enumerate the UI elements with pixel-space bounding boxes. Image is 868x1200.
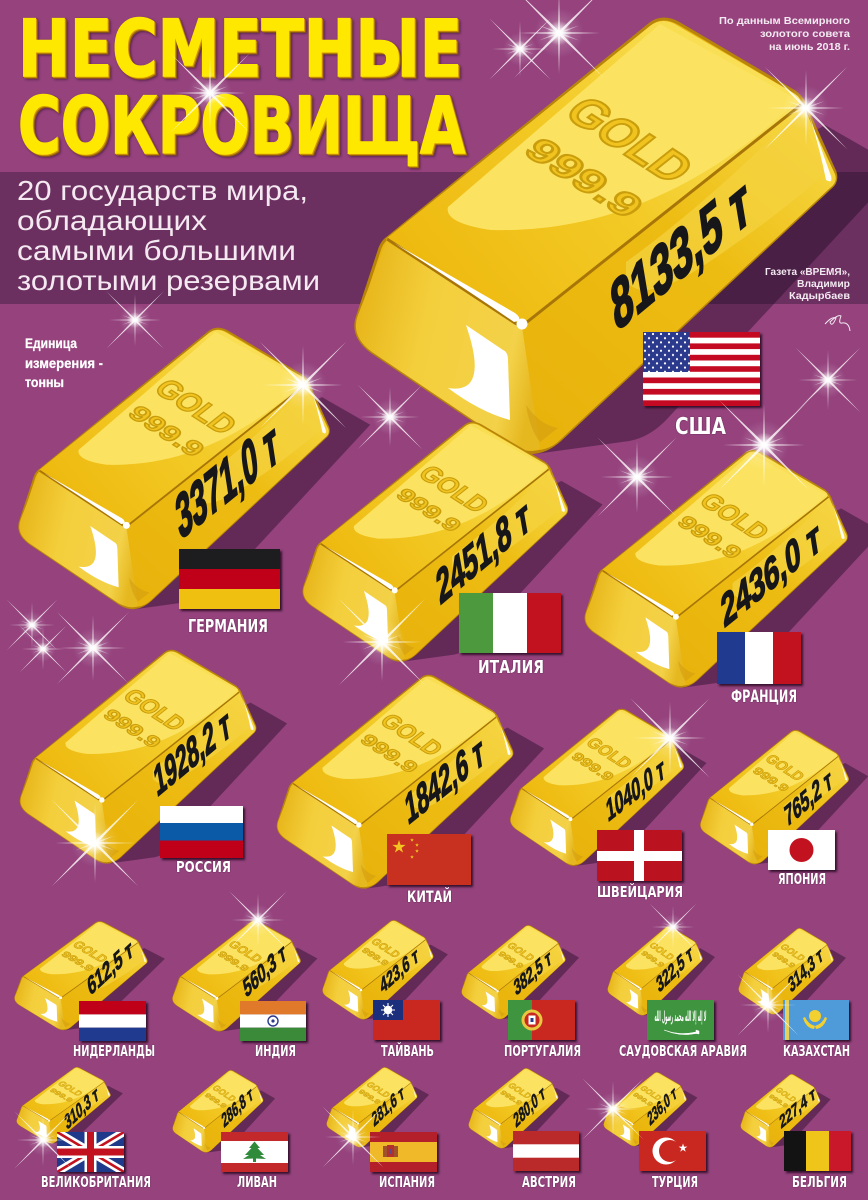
- flag: France: [717, 632, 801, 684]
- value: India: 560,3 т: [241, 937, 288, 1003]
- gold bar: Taiwan: 999.9: [359, 946, 391, 967]
- country: Netherlands: [15, 921, 165, 1060]
- subtitle: 20 государств мира,: [17, 175, 308, 206]
- gold bar: China: GOLD: [375, 709, 449, 760]
- country: Germany: [19, 329, 370, 637]
- gold bar: Japan: 999.9: [749, 765, 792, 794]
- gold bar: France: GOLD: [693, 488, 776, 545]
- subtitle: золотыми резервами: [17, 265, 320, 296]
- unit note: [25, 335, 103, 390]
- gold bar: Portugal: 999.9: [496, 950, 526, 970]
- gold bar: Spain: 999.9: [356, 1089, 382, 1106]
- country: Kazakhstan: [739, 928, 850, 1060]
- label: Austria: АВСТРИЯ: [522, 1173, 576, 1191]
- flag: Italy: [459, 593, 561, 653]
- title: СОКРОВИЩА: [18, 82, 465, 172]
- gold bar: Russia: [20, 651, 287, 864]
- country: Saudi Arabia: [608, 926, 747, 1060]
- gold bar: Lebanon: GOLD: [210, 1084, 239, 1103]
- gold bar: Italy: [303, 423, 603, 662]
- source note: золотого совета: [760, 29, 850, 40]
- gold bar: Austria: 999.9: [498, 1090, 523, 1107]
- gold bar: USA: [356, 19, 868, 454]
- country: India: [173, 921, 317, 1060]
- label: Spain: ИСПАНИЯ: [379, 1173, 435, 1191]
- gold bar: Portugal: [462, 925, 579, 1019]
- source note: на июнь 2018 г.: [769, 42, 850, 53]
- flag: Portugal: [508, 1000, 575, 1040]
- gold bar: Russia: 999.9: [99, 705, 166, 751]
- flag: China: [387, 834, 471, 885]
- label: Russia: РОССИЯ: [176, 858, 231, 876]
- value: China: 1842,6 т: [402, 727, 487, 835]
- gold bar: France: 999.9: [672, 512, 747, 563]
- gold bar: United Kingdom: 999.9: [48, 1087, 74, 1104]
- gold bar: Lebanon: 999.9: [202, 1092, 228, 1110]
- country: Russia: [20, 651, 287, 876]
- gold bar: Italy: GOLD: [412, 460, 496, 518]
- country: Switzerland: [511, 709, 706, 901]
- gold bar: France: [585, 451, 868, 688]
- country: Turkey: [604, 1072, 706, 1191]
- gold bar: Switzerland: [511, 709, 706, 866]
- label: Turkey: ТУРЦИЯ: [652, 1173, 698, 1191]
- value: United Kingdom: 310,3 т: [63, 1081, 100, 1134]
- value: Austria: 280,0 т: [511, 1081, 547, 1132]
- gold bar: Switzerland: 999.9: [568, 750, 618, 784]
- flag: Austria: [513, 1131, 579, 1171]
- value: Turkey: 236,0 т: [646, 1082, 679, 1130]
- label: Italy: ИТАЛИЯ: [478, 657, 544, 678]
- flag: Netherlands: [79, 1001, 146, 1041]
- country: Austria: [469, 1068, 579, 1191]
- gold bar: United Kingdom: [17, 1067, 123, 1143]
- title: НЕСМЕТНЫЕ: [18, 5, 462, 95]
- unit note: измерения -: [25, 355, 103, 371]
- gold bar: Germany: [19, 329, 370, 609]
- label: France: ФРАНЦИЯ: [731, 687, 797, 707]
- source note: [719, 16, 850, 53]
- flag: USA: [643, 332, 760, 406]
- country: Portugal: [462, 925, 581, 1060]
- gold bar: Switzerland: GOLD: [582, 734, 637, 772]
- gold bar: Russia: GOLD: [118, 684, 192, 735]
- flag: Belgium: [784, 1131, 851, 1171]
- gold bar: Italy: 999.9: [391, 485, 466, 536]
- label: Portugal: ПОРТУГАЛИЯ: [504, 1042, 581, 1060]
- title: [18, 5, 465, 172]
- flag: Switzerland: [597, 830, 682, 881]
- flag: Turkey: [639, 1131, 706, 1171]
- gold bar: India: 999.9: [214, 950, 251, 974]
- subtitle: [17, 175, 320, 296]
- value: Belgium: 227,4 т: [778, 1083, 817, 1133]
- gold bar: Kazakhstan: GOLD: [777, 942, 807, 963]
- label: United Kingdom: ВЕЛИКОБРИТАНИЯ: [41, 1173, 151, 1191]
- value: Netherlands: 612,5 т: [85, 933, 135, 1001]
- gold bar: Austria: GOLD: [506, 1081, 534, 1100]
- unit note: Единица: [25, 335, 77, 351]
- label: Japan: ЯПОНИЯ: [778, 870, 826, 888]
- gold bar: Kazakhstan: [739, 928, 846, 1014]
- country: Japan: [701, 730, 868, 888]
- country: China: [277, 676, 544, 906]
- label: India: ИНДИЯ: [255, 1042, 296, 1060]
- country: Italy: [303, 423, 603, 678]
- subtitle band: [0, 172, 868, 304]
- flag: Taiwan: [373, 1000, 440, 1040]
- value: Switzerland: 1040,0 т: [604, 751, 666, 828]
- value: France: 2436,0 т: [718, 510, 823, 638]
- gold bar: Netherlands: [15, 921, 165, 1030]
- flag: Spain: [370, 1132, 437, 1172]
- gold bar: Spain: GOLD: [364, 1080, 393, 1099]
- text: لا إله إلا الله محمد رسول الله: [654, 1009, 706, 1025]
- source note: По данным Всемирного: [719, 16, 850, 27]
- gold bar: United Kingdom: GOLD: [55, 1079, 85, 1098]
- label: China: КИТАЙ: [407, 887, 452, 906]
- gold bar: India: [173, 921, 317, 1031]
- value: Kazakhstan: 314,3 т: [786, 942, 825, 997]
- label: Switzerland: ШВЕЙЦАРИЯ: [597, 882, 683, 901]
- label: Netherlands: НИДЕРЛАНДЫ: [73, 1042, 155, 1060]
- country: Lebanon: [173, 1070, 288, 1191]
- country: USA: [356, 19, 868, 454]
- gold bar: China: [277, 676, 544, 889]
- gold bar: USA: 999.9: [515, 132, 652, 225]
- value: Japan: 765,2 т: [783, 764, 834, 833]
- value: USA: 8133,5 т: [606, 161, 754, 347]
- gold bar: Turkey: 999.9: [631, 1092, 655, 1108]
- signature: [825, 316, 850, 331]
- unit note: тонны: [25, 374, 64, 390]
- gold bar: Turkey: [604, 1072, 697, 1146]
- country: United Kingdom: [17, 1067, 151, 1191]
- gold bar: Netherlands: 999.9: [58, 950, 96, 974]
- credit: [765, 267, 850, 302]
- credit: Владимир: [797, 279, 850, 290]
- value: Portugal: 382,5 т: [512, 945, 553, 1001]
- flag: Germany: [179, 549, 280, 609]
- flag: Lebanon: [221, 1132, 288, 1172]
- value: Saudi Arabia: 322,5 т: [654, 941, 695, 998]
- credit: Газета «ВРЕМЯ»,: [765, 267, 850, 278]
- gold bar: Austria: [469, 1068, 570, 1148]
- label: Germany: ГЕРМАНИЯ: [188, 616, 268, 637]
- flag: Kazakhstan: [783, 1000, 849, 1040]
- value: Spain: 281,6 т: [370, 1081, 406, 1131]
- country: Belgium: [741, 1074, 851, 1191]
- gold bar: Germany: 999.9: [122, 402, 210, 462]
- country: Taiwan: [323, 920, 448, 1060]
- label: Taiwan: ТАЙВАНЬ: [381, 1041, 434, 1060]
- gold bar: China: 999.9: [356, 730, 423, 776]
- gold bar: Kazakhstan: 999.9: [770, 950, 798, 969]
- flag: Russia: [160, 806, 243, 858]
- label: Lebanon: ЛИВАН: [237, 1173, 277, 1191]
- gold bar: Germany: GOLD: [147, 373, 245, 440]
- value: Italy: 2451,8 т: [433, 489, 533, 616]
- gold bar: Lebanon: [173, 1070, 275, 1153]
- gold bar: Turkey: GOLD: [638, 1084, 664, 1102]
- country: France: [585, 451, 868, 707]
- country: Spain: [327, 1067, 437, 1191]
- gold bar: Taiwan: GOLD: [368, 937, 402, 960]
- flag: Japan: [768, 830, 835, 870]
- label: USA: США: [675, 414, 726, 440]
- gold bar: Taiwan: [323, 920, 448, 1020]
- value: Taiwan: 423,6 т: [378, 943, 420, 999]
- value: Germany: 3371,0 т: [172, 406, 282, 553]
- gold bar: India: GOLD: [225, 938, 265, 965]
- label: Saudi Arabia: САУДОВСКАЯ АРАВИЯ: [619, 1042, 747, 1060]
- subtitle: самыми большими: [17, 235, 296, 266]
- credit: Кадырбаев: [789, 290, 850, 302]
- gold bar: USA: GOLD: [554, 89, 704, 192]
- gold bar: Belgium: [741, 1074, 831, 1147]
- gold bar: Saudi Arabia: [608, 926, 715, 1016]
- gold bar: Japan: GOLD: [761, 752, 808, 784]
- gold bar: Belgium: GOLD: [773, 1086, 799, 1104]
- flag: India: [240, 1001, 306, 1041]
- gold bar: Belgium: 999.9: [767, 1094, 790, 1110]
- gold bar: Saudi Arabia: GOLD: [646, 941, 676, 962]
- subtitle: обладающих: [17, 205, 207, 236]
- gold bar: Spain: [327, 1067, 429, 1147]
- flag: United Kingdom: [57, 1132, 124, 1172]
- gold bar: Saudi Arabia: 999.9: [639, 949, 666, 969]
- value: Lebanon: 286,8 т: [220, 1082, 255, 1132]
- gold bar: Portugal: GOLD: [504, 941, 537, 963]
- gold bar: Japan: [701, 730, 868, 864]
- gold bar: Netherlands: GOLD: [69, 938, 112, 965]
- value: Russia: 1928,2 т: [151, 699, 233, 806]
